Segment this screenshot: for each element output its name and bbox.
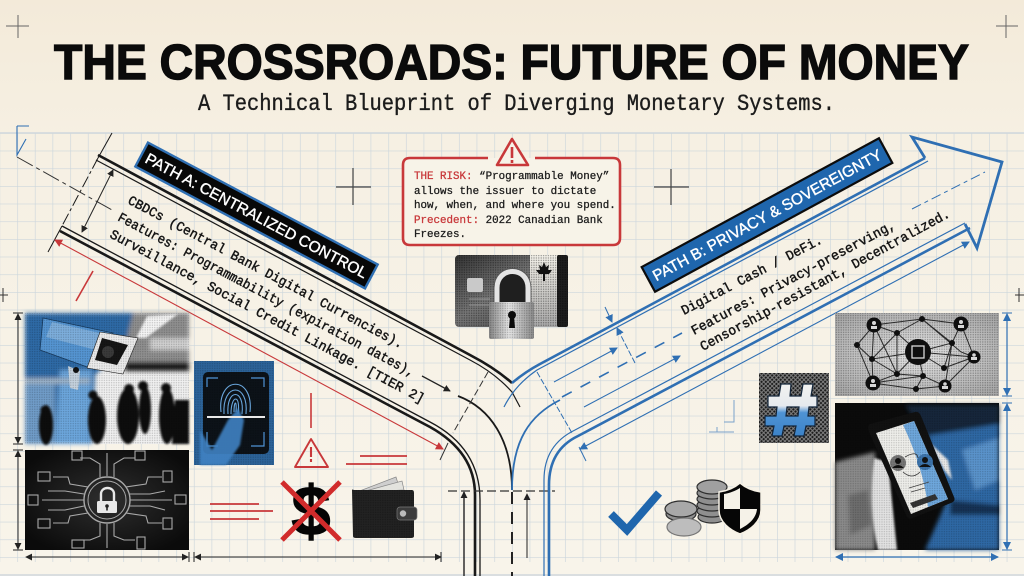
callout: the risk <box>403 139 620 245</box>
label: path A: PATH A: CENTRALIZED CONTROL <box>142 151 370 282</box>
label: path B: PATH B: PRIVACY & SOVEREIGNTY <box>650 147 885 285</box>
icon: shield <box>719 483 761 534</box>
red annotation lines <box>55 240 443 519</box>
text block: path B description: Features: Privacy-preserving, <box>689 219 899 339</box>
callout: the risk: how, when, and where you spend. <box>414 200 616 212</box>
image: circuit lock <box>25 450 189 550</box>
text block: path B description: Digital Cash / DeFi. <box>679 234 826 319</box>
image: surveillance camera over crowd <box>25 313 189 445</box>
icon: coins <box>665 480 727 536</box>
subtitle: A Technical Blueprint of Diverging Monetary Systems. <box>198 91 835 117</box>
dimension arrows: path B <box>17 126 1012 557</box>
icon: crossed-out dollar: $ <box>292 472 330 550</box>
text block: path A description: CBDCs (Central Bank Digital Currencies). <box>125 194 405 353</box>
arrow head: path B <box>912 137 1002 248</box>
image: phone in hand <box>835 403 999 550</box>
registration marks <box>0 15 1024 302</box>
callout: the risk: Precedent: <box>414 215 479 227</box>
image: hash tile <box>759 373 829 443</box>
title: THE CROSSROADS: FUTURE OF MONEY <box>54 36 969 90</box>
road: path A lines <box>17 133 555 576</box>
callout: the risk: allows the issuer to dictate <box>414 186 596 198</box>
icon: crossed-out dollar <box>282 472 340 550</box>
road: path B lines <box>504 158 985 576</box>
callout: the risk: 2022 Canadian Bank <box>479 215 603 227</box>
icon: wallet <box>352 477 417 538</box>
text block: path A description: Surveillance, Social Credit Linkage. [TIER 2] <box>107 228 426 408</box>
icon: check mark <box>611 493 659 530</box>
callout: the risk: Freezes. <box>414 229 466 241</box>
image: network graph <box>835 313 999 396</box>
image: frozen card with padlock <box>455 255 568 339</box>
icon: warning triangle <box>295 439 328 467</box>
text block: path A description: Features: Programmability (expiration dates), <box>115 211 417 381</box>
icon: warning triangle <box>497 139 528 165</box>
dimension arrows: path A <box>13 170 527 576</box>
image: fingerprint scanner <box>194 361 274 465</box>
text block: path B description: Censorship-resistant, Decentralized. <box>698 208 953 355</box>
callout: the risk: THE RISK: “Programmable Money” <box>414 171 609 183</box>
